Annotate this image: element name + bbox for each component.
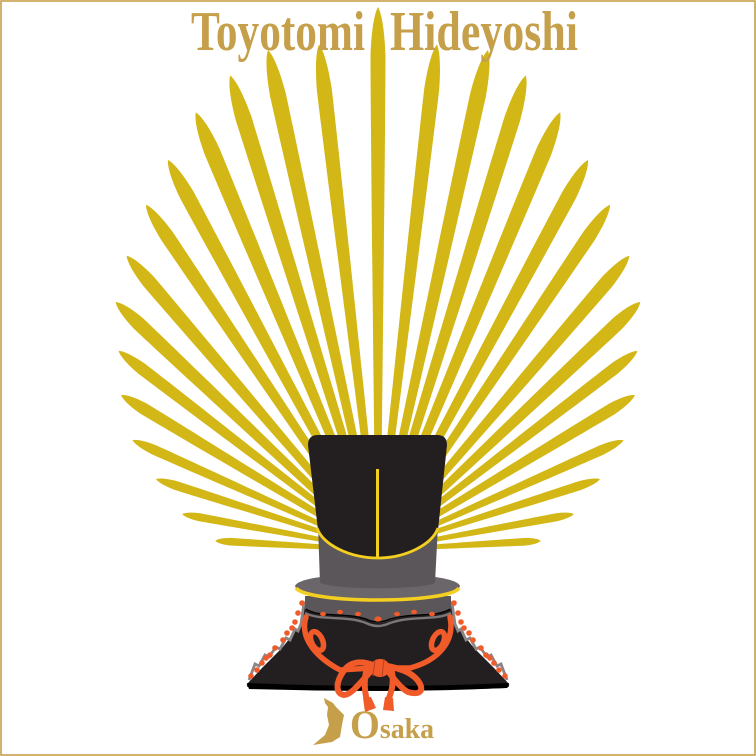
brim yellow edge: [296, 588, 459, 600]
title: [191, 1, 578, 63]
Osaka label: Osaka: [350, 702, 434, 747]
grey collar band: [305, 596, 451, 623]
helmet bottom edge: [247, 683, 509, 691]
rope knot: [370, 659, 390, 677]
fan of golden rays: [111, 7, 645, 555]
Osaka silhouette icon: [313, 698, 344, 745]
helmet lower body: [247, 600, 509, 691]
helmet: [247, 435, 509, 712]
orange studs: [320, 610, 435, 622]
wavy grey cord: [305, 613, 451, 626]
crown yellow outline: [317, 528, 438, 558]
wavy black cord: [306, 609, 450, 622]
left neck-guard lames: [248, 600, 305, 680]
orange rope: [304, 617, 451, 700]
brim: [295, 574, 460, 600]
crown centre line: [376, 469, 379, 557]
title: Toyotomi: [191, 1, 365, 63]
right neck-guard lames: [451, 600, 508, 680]
rope tassels: [363, 697, 394, 712]
cap grey band: [318, 525, 438, 588]
title: Hideyoshi: [390, 1, 578, 63]
cap crown: [308, 435, 447, 558]
